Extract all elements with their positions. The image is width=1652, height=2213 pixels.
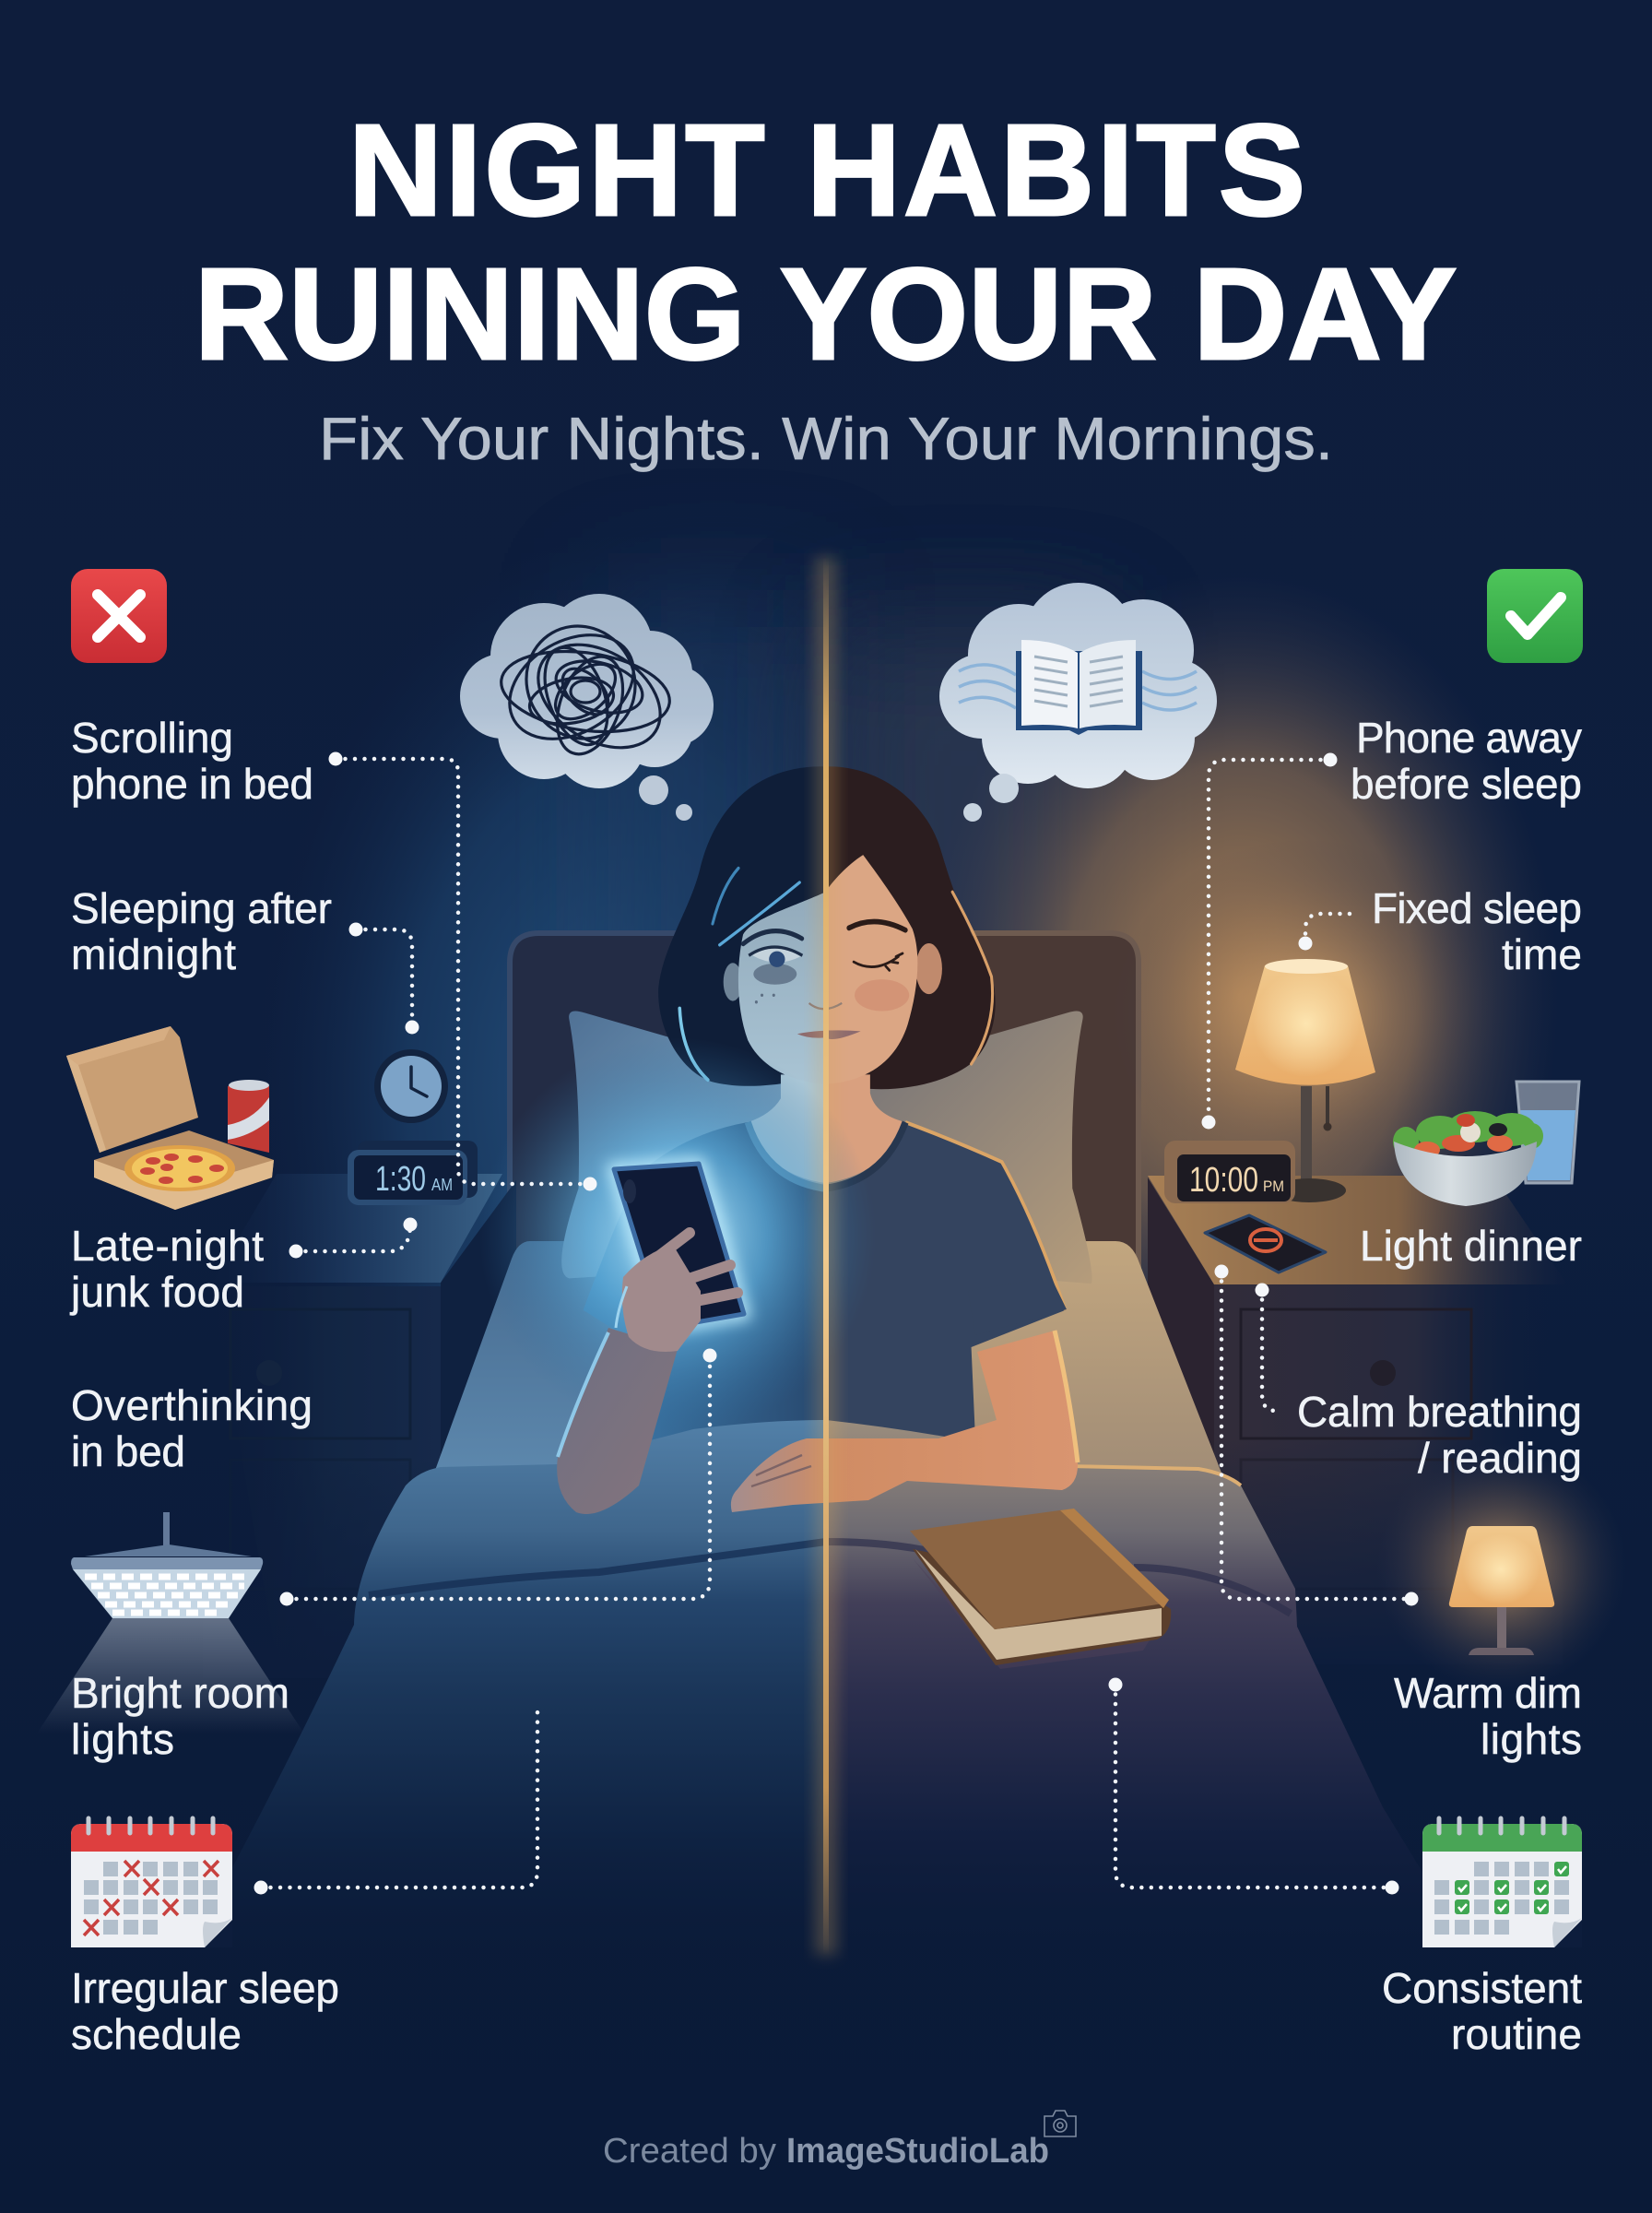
left arm: [557, 1328, 678, 1514]
label: warm dim lights: lights: [1481, 1715, 1582, 1763]
icon: alarm clock 1:30 AM: 1:30: [375, 1160, 426, 1199]
icon: ceiling light: [37, 1512, 304, 1734]
right arm: [731, 1331, 1078, 1512]
label: irregular sleep schedule: [71, 1964, 339, 2058]
icon: bedside table lamp: [1112, 839, 1499, 1202]
label: sleeping after midnight: midnight: [71, 930, 236, 978]
label: fixed sleep time: Fixed sleep: [1372, 884, 1582, 932]
dotted connector lines: [261, 759, 1411, 1888]
icon: irregular calendar: [71, 1818, 232, 1947]
left nightstand: [203, 1174, 521, 1678]
connector end dots: [254, 752, 1418, 1894]
footer credit: [603, 2111, 1076, 2171]
label: bright room lights: Bright room: [71, 1669, 289, 1717]
bed sheet: [433, 1241, 1226, 1485]
hair: [658, 766, 996, 1089]
blanket: [175, 1420, 1484, 1973]
icon: camera: [1044, 2111, 1076, 2136]
hand holding phone: [616, 1233, 738, 1352]
icon: alarm clock 10:00 PM: 10:00: [1189, 1161, 1258, 1200]
label: scrolling phone in bed: phone in bed: [71, 760, 313, 808]
phone halo: [614, 1164, 744, 1328]
icon: alarm clock 1:30 AM: AM: [431, 1176, 453, 1194]
phone: [614, 1164, 744, 1328]
label: warm dim lights: [1394, 1669, 1582, 1763]
icon: warm dim lamp: [1377, 1443, 1626, 1692]
label: warm dim lights: Warm dim: [1394, 1669, 1582, 1717]
label: bright room lights: [71, 1669, 289, 1763]
icon: pizza box and soda can: [66, 1026, 274, 1210]
icon: consistent calendar: [1422, 1818, 1582, 1947]
wave lines: [959, 665, 1197, 710]
label: overthinking in bed: in bed: [71, 1427, 185, 1475]
label: late-night junk food: [69, 1222, 264, 1316]
label: sleeping after midnight: Sleeping after: [71, 884, 332, 932]
label: irregular sleep schedule: schedule: [71, 2010, 242, 2058]
icon: wall clock: [374, 1049, 448, 1123]
footer credit: ImageStudioLab: [786, 2132, 1049, 2171]
label: bright room lights: lights: [71, 1715, 174, 1763]
book icon: [1016, 640, 1142, 735]
icon: alarm clock 10:00 PM: [1164, 1141, 1295, 1203]
label: phone away before sleep: Phone away: [1356, 714, 1582, 762]
arms and hands with phone: [557, 1164, 1078, 1514]
right nightstand: [1148, 1176, 1567, 1664]
icon: alarm clock 1:30 AM: [348, 1141, 478, 1205]
label: consistent routine: routine: [1451, 2010, 1582, 2058]
label: calm breathing / reading: Calm breathing: [1297, 1388, 1582, 1436]
icon: phone face down with block sign: [1205, 1215, 1326, 1272]
label: phone away before sleep: [1351, 714, 1582, 808]
label: overthinking in bed: [71, 1381, 313, 1475]
woman: hair, face, pillows and torso: [561, 766, 1092, 1506]
phone camera: [623, 1179, 636, 1203]
thought cloud: open book: [939, 583, 1217, 822]
label: calm breathing / reading: / reading: [1418, 1434, 1582, 1482]
book on blanket: [910, 1509, 1171, 1669]
centre divider line: [815, 557, 837, 1955]
label: scrolling phone in bed: [71, 714, 313, 808]
label: calm breathing / reading: [1297, 1388, 1582, 1482]
title: NIGHT HABITS: [348, 97, 1305, 243]
label: irregular sleep schedule: Irregular sleep: [71, 1964, 339, 2012]
title: RUINING YOUR DAY: [195, 241, 1457, 386]
label: fixed sleep time: [1372, 884, 1582, 978]
sleeve over arm: [968, 1277, 1067, 1335]
label: light dinner: Light dinner: [1360, 1222, 1582, 1270]
scene background: blue and warm wall glows: [258, 535, 1558, 1641]
label: late-night junk food: Late-night: [71, 1222, 264, 1270]
icon: salad bowl and water glass: [1393, 1082, 1579, 1206]
shirt: [584, 1122, 1066, 1506]
icon: alarm clock 10:00 PM: PM: [1263, 1178, 1284, 1195]
icon: green check badge: [1487, 569, 1583, 663]
face: [720, 855, 917, 1084]
ears: [724, 943, 942, 1001]
label: consistent routine: Consistent: [1382, 1964, 1582, 2012]
title: [195, 97, 1457, 386]
icon: red cross badge: [71, 569, 167, 663]
label: consistent routine: [1382, 1964, 1582, 2058]
neck: [748, 1074, 905, 1183]
scribble icon: [491, 606, 678, 769]
thought cloud: tangled thoughts: [460, 594, 714, 821]
label: scrolling phone in bed: Scrolling: [71, 714, 233, 762]
footer credit: Created by: [603, 2132, 776, 2171]
label: late-night junk food: junk food: [69, 1268, 244, 1316]
left labels: bad habits: [69, 714, 339, 2058]
pillows: [561, 1011, 1092, 1284]
phone glow: [479, 1037, 876, 1434]
subtitle: Fix Your Nights. Win Your Mornings.: [319, 405, 1333, 472]
label: sleeping after midnight: [71, 884, 332, 978]
bed headboard: [510, 933, 1139, 1309]
label: overthinking in bed: Overthinking: [71, 1381, 313, 1429]
label: phone away before sleep: before sleep: [1351, 760, 1582, 808]
right labels: good habits: [1297, 714, 1582, 2058]
label: fixed sleep time: time: [1502, 930, 1582, 978]
